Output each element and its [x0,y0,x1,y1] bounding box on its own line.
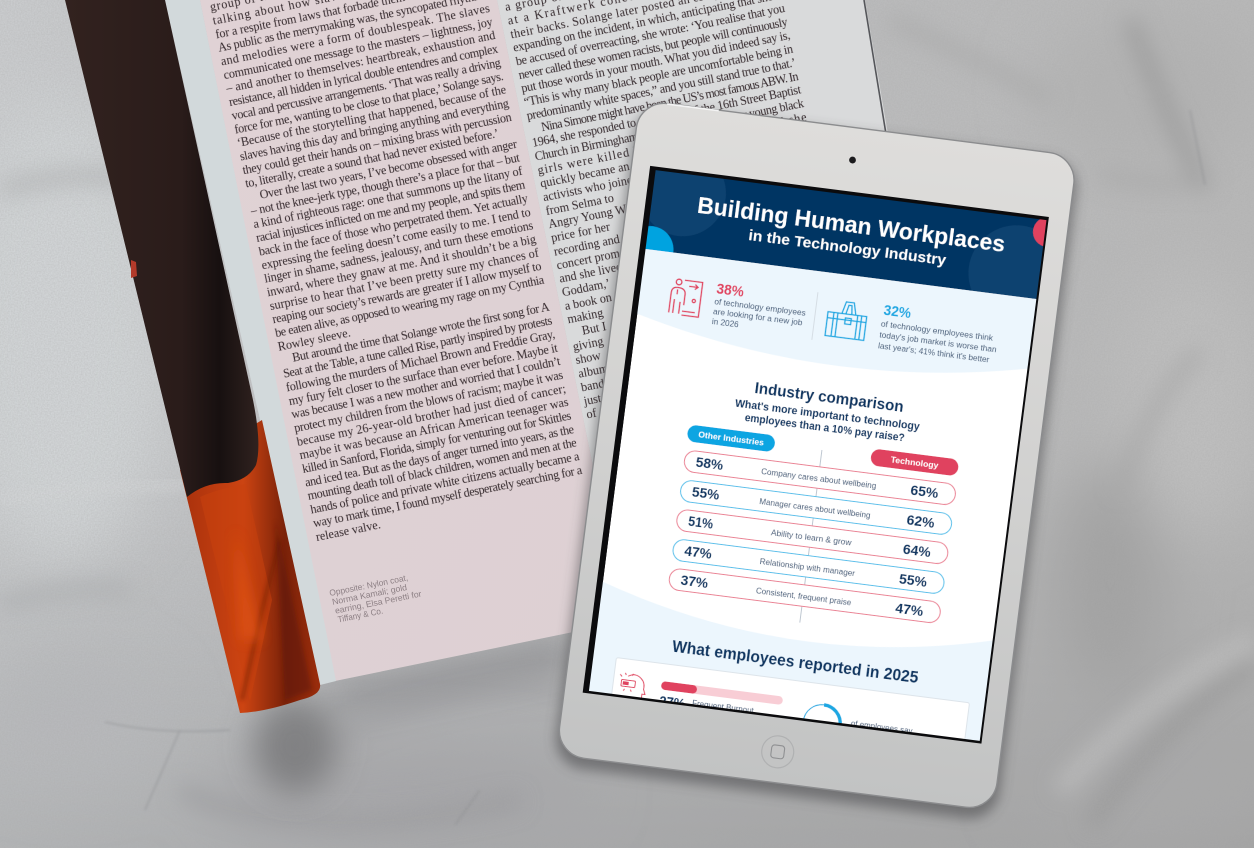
comparison row: ability to learn and grow: 51% [687,514,714,532]
left column of article text: – not the knee-jerk type, though there’s a place for that – but [248,150,521,218]
stat: 32 percent: of technology employees think [880,319,994,343]
heading: industry comparison: Industry comparison [754,380,905,416]
stat: 38 percent: in 2026 [711,316,740,329]
left column of article text: force for me, wanting to be close to that place,’ Solange says. [233,69,505,136]
left column of article text: vocal and percussive arrangements. ‘That was really a driving [230,55,502,123]
tablet camera [849,156,856,164]
right column of article text: giving [572,334,605,354]
left column of article text: reaping our society’s rewards are greater if I allow myself to [271,259,543,326]
comparison row: ability to learn and grow [676,509,949,565]
black screen bezel [583,166,1049,744]
infographic on screen [588,170,1046,741]
left column of article text: killed in Sanford, Florida, simply for venturing out for Skittles [301,408,573,476]
comparison row: manager cares about wellbeing [679,479,953,535]
left column of article text: was because I was a new mother and worried that I couldn’t [290,354,562,422]
stat: 32 percent [878,305,996,362]
centre axis line [800,450,822,623]
comparison row: relationship with manager: 55% [898,571,928,590]
left column of article text: communicated one message to the masters – lightness, joy [222,15,494,82]
right column of article text: be accused of overreacting, she wrote: ‘You realise that you [515,1,786,68]
comparison row: consistent, frequent praise: 47% [894,601,924,619]
magazine shadow on sheet [253,640,570,793]
left column of article text: resistance, all hidden in lyrical double entendres and complex [228,42,499,109]
left column of article text: racial injustices inflicted on me and my people, and spits them [255,177,527,245]
comparison row: manager cares about wellbeing: 62% [906,512,935,531]
heading: what employees reported: What employees reported in 2025 [671,637,919,687]
legend pill: technology [870,448,959,476]
left column of article text: be eaten alive, as opposed to wearing my rage on my Cynthia [274,273,546,340]
magazine spine: orange section [180,420,320,713]
left column of article text: ‘Because of the storytelling that happened, because of the [236,83,507,150]
right column of article text: put those words in your mouth. What you did indeed say is, [520,28,791,96]
progress bar: frequent burnout [658,681,783,724]
progress bar: frequent burnout: 27% [658,692,687,712]
comparison row: company cares about wellbeing [683,450,957,506]
red speck on spine [131,260,137,278]
right column of article text: activists who joined [542,172,639,204]
left column of article text: Rowley sleeve. [277,325,352,354]
right column of article text: price for her [550,220,611,245]
subtitle: in the Technology Industry [748,227,948,269]
left column of article text: Over the last two years, I’ve become obsessed with anger [258,137,518,202]
left column of article text: mounting death toll of black children, women and men at the [306,436,578,503]
left column of article text: – and another to themselves: heartbreak, exhaustion and [224,28,496,96]
comparison row: company cares about wellbeing: Company cares about wellbeing [761,466,877,491]
stat: 38 percent: are looking for a new job [713,306,803,327]
right column of article text [503,0,857,422]
left column of article text: surprise to hear that I’ve been pretty sure my chances of [268,245,541,313]
left column of article text: maybe it was because an African American teenager was [298,395,570,462]
tablet body [556,100,1077,811]
pale page gutter [165,0,336,685]
comparison row: company cares about wellbeing: 65% [910,483,939,501]
left column of article text: hands of police and private white citizens actually became a [309,449,581,517]
left column of article text: back in the face of those who perpetrated them. Yet actually [258,191,529,259]
comparison row: consistent, frequent praise: 37% [680,573,709,591]
right column of article text: But I [581,319,607,338]
left column of article text: linger in shame, sadness, jealousy, and turn these emotions [263,218,535,286]
tablet top highlight edge [667,104,719,111]
left column of article text: and iced tea. But as the days of anger turned into years, as the [304,422,575,489]
tablet home button [760,734,796,770]
right column of article text: concert promoter [555,242,639,272]
icon: head with low battery [620,672,646,698]
panel: job stats [637,249,1036,373]
header blue circle [646,226,674,252]
stat: 32 percent: 32% [883,303,912,322]
magazine [65,0,889,793]
comparison row: manager cares about wellbeing: 55% [691,484,720,503]
right column of article text: just [581,391,603,408]
right column of article text: Church in Birmingham, Alabama, in which four young black [534,96,806,164]
right column of article text: band [580,376,605,394]
left column of article text: slaves having this day and bringing anything and everything [239,96,510,164]
comparison row: relationship with manager: Relationship with manager [759,556,856,578]
tablet shadow [552,105,1080,822]
question subheading: employees than a 10% pay raise? [744,412,905,444]
header band [646,170,1046,299]
header red circle [1032,219,1046,246]
left column of article text: protect my children from the blows of racism; maybe it was [293,368,565,435]
left column of article text: they could get their hands on – mixing brass with percussion [241,110,513,177]
comparison row: ability to learn and grow: Ability to learn & grow [770,527,853,548]
right column of article text: a book on [563,290,613,313]
left column of article text [208,0,587,544]
right column of article text: making [566,306,604,326]
legend pill: technology: Technology [890,454,939,470]
right column of article text: never called these women racists, but people will continuously [517,15,789,82]
left column of article text: my fury felt closer to the surface than ever before. Maybe it [287,340,559,408]
right column of article text: Nina Simone might have been the US’s most famous ABW. In [540,69,800,134]
right column of article text: girls were killed by white supremacists, and she [536,110,808,177]
right column of article text: Goddam,’ [561,276,611,299]
left column of article text: way to mark time, I found myself desperately searching for a [312,463,584,530]
left column of article text: release valve. [315,517,382,544]
stat: 38 percent: 38% [715,281,745,301]
legend pill: other industries [686,424,776,452]
icon: person leaving through door [669,278,703,317]
right column of article text: quickly became an [539,159,631,191]
legend pill: other industries: Other Industries [698,429,765,448]
photo caption: Tiffany & Co. [337,606,384,624]
right column of article text: album [577,361,610,381]
comparison row: consistent, frequent praise: Consistent, frequent praise [755,585,852,607]
photo caption [328,570,424,625]
photo caption: earring, Elsa Peretti for [334,589,422,616]
donut caption: of employees say [850,718,914,736]
stat: 38 percent: of technology employees [714,296,806,318]
left column of article text: following the murders of Michael Brown and Freddie Gray, [285,327,556,394]
progress bar: frequent burnout: Frequent Burnout [692,698,755,715]
right column of article text: from Selma to [544,191,615,218]
header decorative pale circles [650,170,726,236]
photo caption: Norma Kamali; gold [331,582,408,607]
comparison row: company cares about wellbeing: 58% [695,455,724,473]
tablet [552,100,1081,822]
left column of article text: a kind of righteous rage: one that summons up the litany of [252,164,524,231]
divider [812,292,818,340]
comparison row: relationship with manager: 47% [684,543,713,562]
panel background: lower light-blue wave [584,580,995,745]
left column of article text: because my 26-year-old brother had just died of cancer; [296,381,567,449]
left column of article text: inward, where they gnaw at me. And it shouldn’t be a big [266,232,537,299]
left column of article text: expressing the feeling doesn’t come easily to me. I tend to [260,205,532,272]
right column of article text: recording and [553,232,621,259]
right column of article text: of [585,406,599,422]
icon: briefcase [825,300,868,340]
stat: 32 percent: today's job market is worse than [879,329,997,354]
left column of article text: But around the time that Solange wrote the first song for A [291,300,551,365]
magazine spine: dark section [65,0,258,497]
comparison row: relationship with manager [672,538,945,595]
stat: 32 percent: last year's; 41% think it's better [878,340,990,365]
right column of article text: show [574,348,602,367]
photo caption: Opposite: Nylon coat, [328,572,409,598]
left column of article text: Seat at the Table, a tune called Rise, partly inspired by protests [282,313,554,381]
comparison row: consistent, frequent praise [668,568,942,624]
comparison row: ability to learn and grow: 64% [902,542,932,560]
right column of article text: predominantly white spaces,” and you still stand true to that.’ [525,55,797,123]
main title: Building Human Workplaces [696,192,1007,257]
left column of article text: and melodies were a form of doublespeak. The slaves [220,1,491,68]
right column of article text: and she lived [558,260,623,286]
question subheading: What's more important to technology [734,398,921,433]
donut chart [801,702,842,744]
comparison row: manager cares about wellbeing: Manager cares about wellbeing [759,496,871,520]
left magazine page in pink [200,0,612,681]
left column of article text: to, literally, create a sound that had never existed before.’ [244,126,500,191]
stat: 38 percent [712,284,806,328]
right column of article text: Angry Young Women [547,197,653,231]
right magazine page [497,0,889,500]
panel: reported metrics card [612,658,970,739]
right column of article text: 1964, she responded to a bombing of the 16th Street Baptist [531,82,803,150]
right column of article text: “This is why many black people are uncomfortable being in [523,42,794,109]
